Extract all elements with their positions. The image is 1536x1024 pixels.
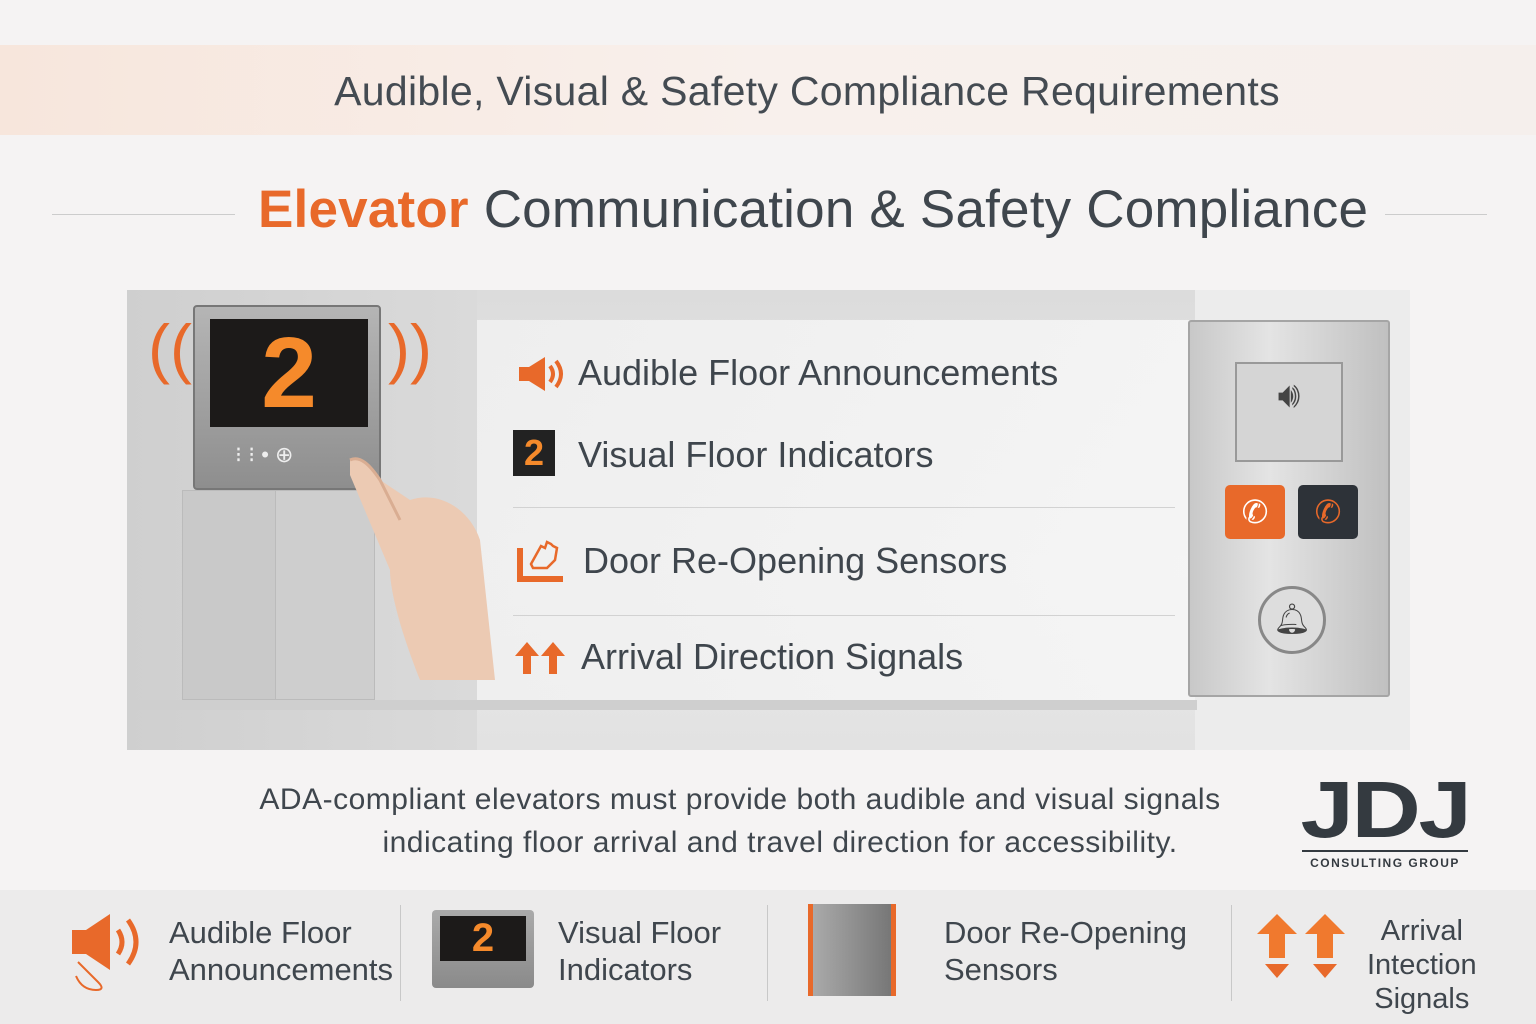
icon: floor display with signals: (( bbox=[148, 311, 192, 385]
main title: Elevator Communication & Safety Compliance bbox=[258, 180, 1368, 239]
item: arrival bbox=[1257, 914, 1477, 1015]
item: visual bbox=[432, 910, 721, 988]
item: audible: Audible Floor Announcements bbox=[578, 352, 1058, 393]
icon: floor display with signals: ⁝ ⁝ • ⊕ bbox=[235, 442, 293, 467]
panel: call buttons: 🔊︎ bbox=[1278, 374, 1300, 415]
panel: call buttons: ✆ bbox=[1315, 494, 1341, 530]
item: visual: Indicators bbox=[558, 952, 692, 987]
item: audible: Announcements bbox=[169, 952, 393, 987]
logo: CONSULTING GROUP bbox=[1310, 856, 1460, 870]
divider left bbox=[52, 214, 235, 215]
item: arrival: Signals bbox=[1374, 983, 1469, 1015]
icon: floor display with signals: )) bbox=[388, 311, 432, 385]
list: features: Visual Floor Indicators bbox=[578, 434, 934, 475]
caption: ADA-compliant elevators must provide both audible and visual signals bbox=[259, 783, 1221, 816]
caption bbox=[259, 783, 1221, 859]
item: visual bbox=[513, 430, 934, 476]
item: visual: 2 bbox=[472, 916, 494, 960]
list: features bbox=[513, 352, 1175, 677]
subtitle: Audible, Visual & Safety Compliance Requirements bbox=[334, 68, 1280, 114]
icon: floor display with signals: 2 bbox=[261, 317, 317, 429]
caption: indicating floor arrival and travel direction for accessibility. bbox=[382, 826, 1178, 859]
item: arrival: Arrival Direction Signals bbox=[581, 636, 963, 677]
logo: JDJ bbox=[1301, 765, 1469, 854]
item: visual: Visual Floor bbox=[558, 915, 721, 950]
item: door: Sensors bbox=[944, 952, 1058, 987]
top band bbox=[0, 45, 1536, 135]
item: arrival: Arrival bbox=[1381, 915, 1463, 947]
icon: floor display with signals bbox=[148, 305, 432, 490]
item: visual: 2 bbox=[524, 432, 544, 473]
item: arrival: Intection bbox=[1367, 949, 1477, 981]
item: door bbox=[808, 904, 1187, 996]
panel: call buttons bbox=[1188, 320, 1390, 697]
item: audible bbox=[72, 914, 393, 991]
item: audible: Audible Floor bbox=[169, 915, 352, 950]
item: door: Door Re-Opening bbox=[944, 915, 1187, 950]
bottom bar bbox=[0, 890, 1536, 1024]
panel: call buttons: ✆ bbox=[1242, 494, 1268, 530]
icon: hand bbox=[349, 457, 495, 680]
item: door: Door Re-Opening Sensors bbox=[583, 540, 1007, 581]
panel: elevator scene bbox=[127, 290, 1410, 750]
panel: call buttons: 🔔︎ bbox=[1273, 603, 1311, 636]
